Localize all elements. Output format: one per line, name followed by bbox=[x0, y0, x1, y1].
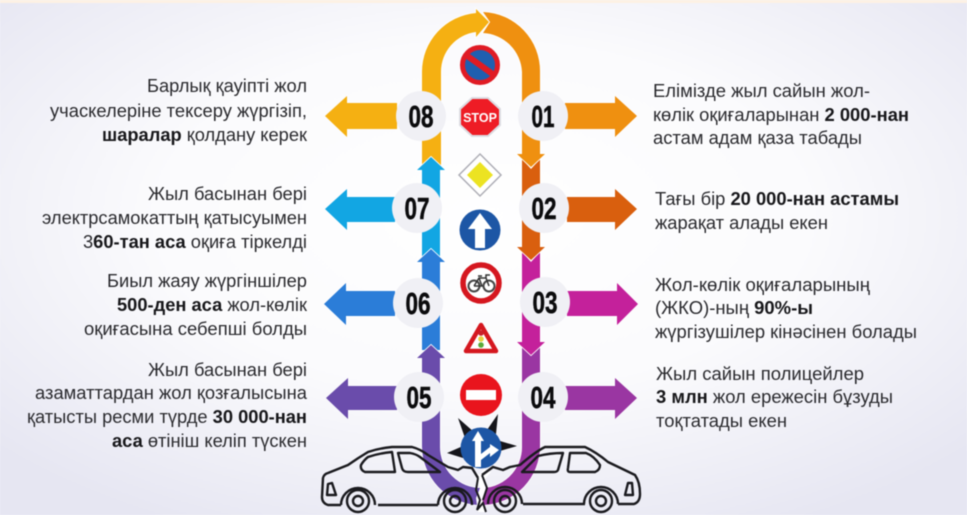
text block 02: Тағы бір 20 000-нан астамы bbox=[655, 189, 899, 209]
text block 07: 360-тан аса оқиға тіркелді bbox=[83, 232, 307, 252]
badge 02: 02 bbox=[532, 191, 556, 226]
text block 01 bbox=[653, 81, 909, 148]
text block 05: аса өтініш келіп түскен bbox=[112, 431, 307, 451]
badge 03: 03 bbox=[532, 285, 558, 320]
text block 05: қатысты ресми түрде 30 000-нан bbox=[27, 407, 307, 427]
badge 07 bbox=[392, 183, 442, 233]
sign: no entry bbox=[460, 374, 502, 416]
sign: no parking bbox=[462, 48, 498, 82]
central road loop bbox=[417, 9, 545, 505]
road segment: purple bottom-left arc bbox=[417, 345, 482, 505]
sign: traffic light warning bbox=[466, 325, 496, 351]
road segment: amber top-left arc bbox=[422, 9, 489, 165]
text block 04: 3 млн жол ережесін бұзуды bbox=[656, 387, 893, 407]
text block 08 bbox=[50, 76, 307, 145]
crash crack bbox=[472, 469, 491, 512]
badge 06: 06 bbox=[406, 286, 430, 321]
text block 04: Жыл сайын полицейлер bbox=[656, 364, 864, 384]
badge 01: 01 bbox=[532, 99, 554, 134]
text block 07: электрсамокаттың қатысуымен bbox=[42, 208, 307, 228]
text block 01: көлік оқиғаларынан 2 000-нан bbox=[653, 105, 909, 125]
sign: no bicycles bbox=[463, 265, 499, 301]
text block 02: жарақат алады екен bbox=[655, 213, 828, 233]
badge 02 bbox=[519, 183, 569, 233]
text block 05 bbox=[27, 360, 308, 451]
arrow 03 bbox=[567, 283, 638, 325]
text block 04: тоқтатады екен bbox=[656, 411, 787, 431]
text block 07: Жыл басынан бері bbox=[148, 184, 307, 204]
sign: ahead only bbox=[460, 210, 500, 250]
sign: direction with impact spikes bbox=[447, 414, 517, 468]
text block 06: Биыл жаяу жүргіншілер bbox=[107, 271, 307, 291]
road segment: cyan bbox=[417, 157, 445, 258]
road segment: violet bottom-right arc bbox=[478, 346, 540, 505]
sign: stop: STOP bbox=[463, 111, 497, 125]
arrow 07 bbox=[325, 189, 395, 230]
badge 07: 07 bbox=[404, 191, 430, 226]
badge 01 bbox=[518, 91, 568, 141]
crash crack line bbox=[476, 475, 487, 512]
badge 06 bbox=[393, 278, 443, 328]
text block 01: Елімізде жыл сайын жол- bbox=[653, 81, 870, 101]
badge 05 bbox=[394, 372, 444, 422]
text block 04 bbox=[656, 364, 893, 431]
sign: stop bbox=[460, 98, 500, 136]
arrow 04 bbox=[565, 378, 637, 419]
text block 06: 500-ден аса жол-көлік bbox=[117, 295, 307, 315]
text block 05: азаматтардан жол қозғалысына bbox=[35, 383, 308, 403]
text block 08: шаралар қолдану керек bbox=[102, 125, 307, 145]
arrow 08 bbox=[325, 96, 397, 137]
sign: priority road bbox=[459, 154, 501, 196]
arrow 06 bbox=[324, 283, 395, 325]
text block 07 bbox=[42, 184, 307, 252]
badge 05: 05 bbox=[406, 380, 432, 415]
road segment: dark orange bbox=[517, 159, 545, 260]
badge 04: 04 bbox=[530, 380, 556, 415]
text block 06: оқиғасына себепші болды bbox=[84, 319, 307, 339]
text block 03: (ЖКО)-ның 90%-ы bbox=[655, 298, 813, 318]
text block 03: Жол-көлік оқиғаларының bbox=[655, 275, 870, 295]
road segment: orange top-right arc bbox=[483, 12, 545, 167]
text block 05: Жыл басынан бері bbox=[148, 360, 307, 380]
left car bbox=[322, 447, 478, 512]
badge 03 bbox=[520, 277, 570, 327]
badge 04 bbox=[518, 372, 568, 422]
right car bbox=[482, 447, 640, 512]
text block 08: Барлық қауіпті жол bbox=[147, 76, 307, 96]
arrow 02 bbox=[567, 189, 637, 230]
arrow 05 bbox=[326, 378, 397, 419]
text block 03 bbox=[655, 275, 917, 342]
text block 08: учаскелеріне тексеру жүргізіп, bbox=[50, 101, 307, 121]
badge 08 bbox=[396, 91, 446, 141]
text block 03: жүргізушілер кінәсінен болады bbox=[655, 322, 917, 342]
arrow 01 bbox=[565, 96, 637, 137]
text block 01: астам адам қаза табады bbox=[653, 128, 862, 148]
text block 06 bbox=[84, 271, 307, 339]
badge 08: 08 bbox=[408, 99, 434, 134]
road segment: magenta bbox=[517, 252, 545, 355]
road segment: blue bbox=[417, 249, 445, 350]
text block 02 bbox=[655, 189, 899, 233]
